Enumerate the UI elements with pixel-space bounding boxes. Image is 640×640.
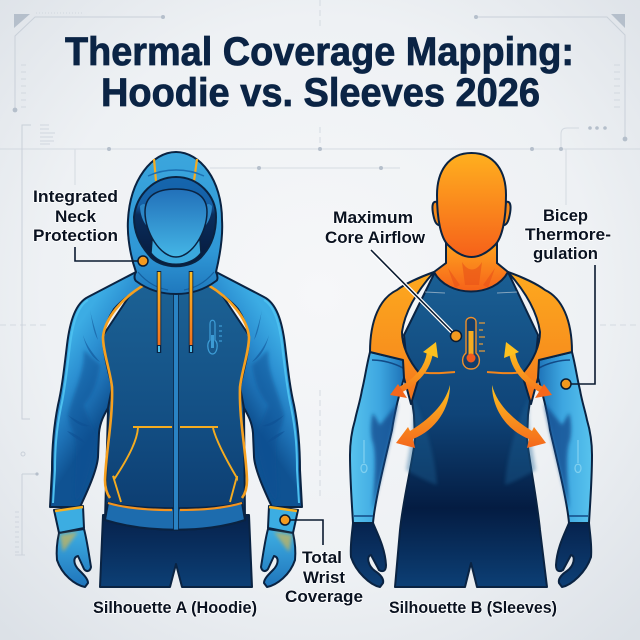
callout: total wrist coverage: Coverage [285, 587, 363, 606]
left sleeve [50, 272, 144, 587]
title [65, 30, 574, 115]
inner hood lining [140, 204, 212, 226]
pocket [113, 427, 237, 502]
ears [432, 202, 511, 225]
callout: maximum core airflow [325, 208, 462, 342]
zipper [174, 268, 178, 530]
chest contour lines [420, 372, 522, 373]
callout: total wrist coverage: Total [302, 548, 342, 567]
left arm sleeve and hand [350, 352, 404, 587]
caption: silhouette B: Silhouette B (Sleeves) [389, 598, 557, 617]
left shoulder [370, 272, 434, 404]
callout: bicep thermoregulation: Bicep [543, 206, 588, 225]
callout: integrated neck protection: Neck [55, 207, 97, 226]
right shoulder [508, 272, 572, 404]
callout: total wrist coverage [280, 515, 363, 606]
callout: total wrist coverage: Wrist [303, 568, 345, 587]
airflow arrows [390, 342, 552, 448]
shoulder highlights [425, 292, 517, 293]
hem [105, 503, 245, 530]
right arm sleeve and hand [538, 352, 592, 587]
hood opening [134, 177, 216, 266]
torso [395, 272, 547, 587]
head [437, 153, 506, 257]
callout: bicep thermoregulation: gulation [533, 244, 598, 263]
title: Thermal Coverage Mapping: [65, 30, 574, 74]
caption: silhouette A: Silhouette A (Hoodie) [93, 598, 257, 617]
faceless head [145, 189, 207, 257]
callout: integrated neck protection [33, 187, 148, 266]
callout: bicep thermoregulation: Thermore- [525, 225, 611, 244]
title: Hoodie vs. Sleeves 2026 [101, 71, 540, 115]
icon: thermometer [463, 318, 485, 369]
collar fold lines [138, 272, 214, 290]
silhouette A: hoodie [50, 152, 302, 587]
hood [128, 152, 222, 294]
callout: integrated neck protection: Integrated [33, 187, 118, 206]
silhouette B: sleeves [350, 153, 592, 587]
neck [151, 240, 201, 264]
neck [434, 235, 508, 292]
drawstrings [159, 271, 191, 353]
side panels [406, 395, 536, 485]
hoodie torso [100, 280, 252, 530]
callout: bicep thermoregulation [525, 206, 611, 389]
callout: integrated neck protection: Protection [33, 226, 118, 245]
right sleeve [208, 272, 302, 587]
pants [100, 515, 252, 587]
hood stripes [154, 159, 197, 181]
raglan seams [103, 285, 144, 498]
callout: maximum core airflow: Core Airflow [325, 228, 426, 247]
icon: thermometer [208, 320, 222, 354]
callout: maximum core airflow: Maximum [333, 208, 413, 227]
